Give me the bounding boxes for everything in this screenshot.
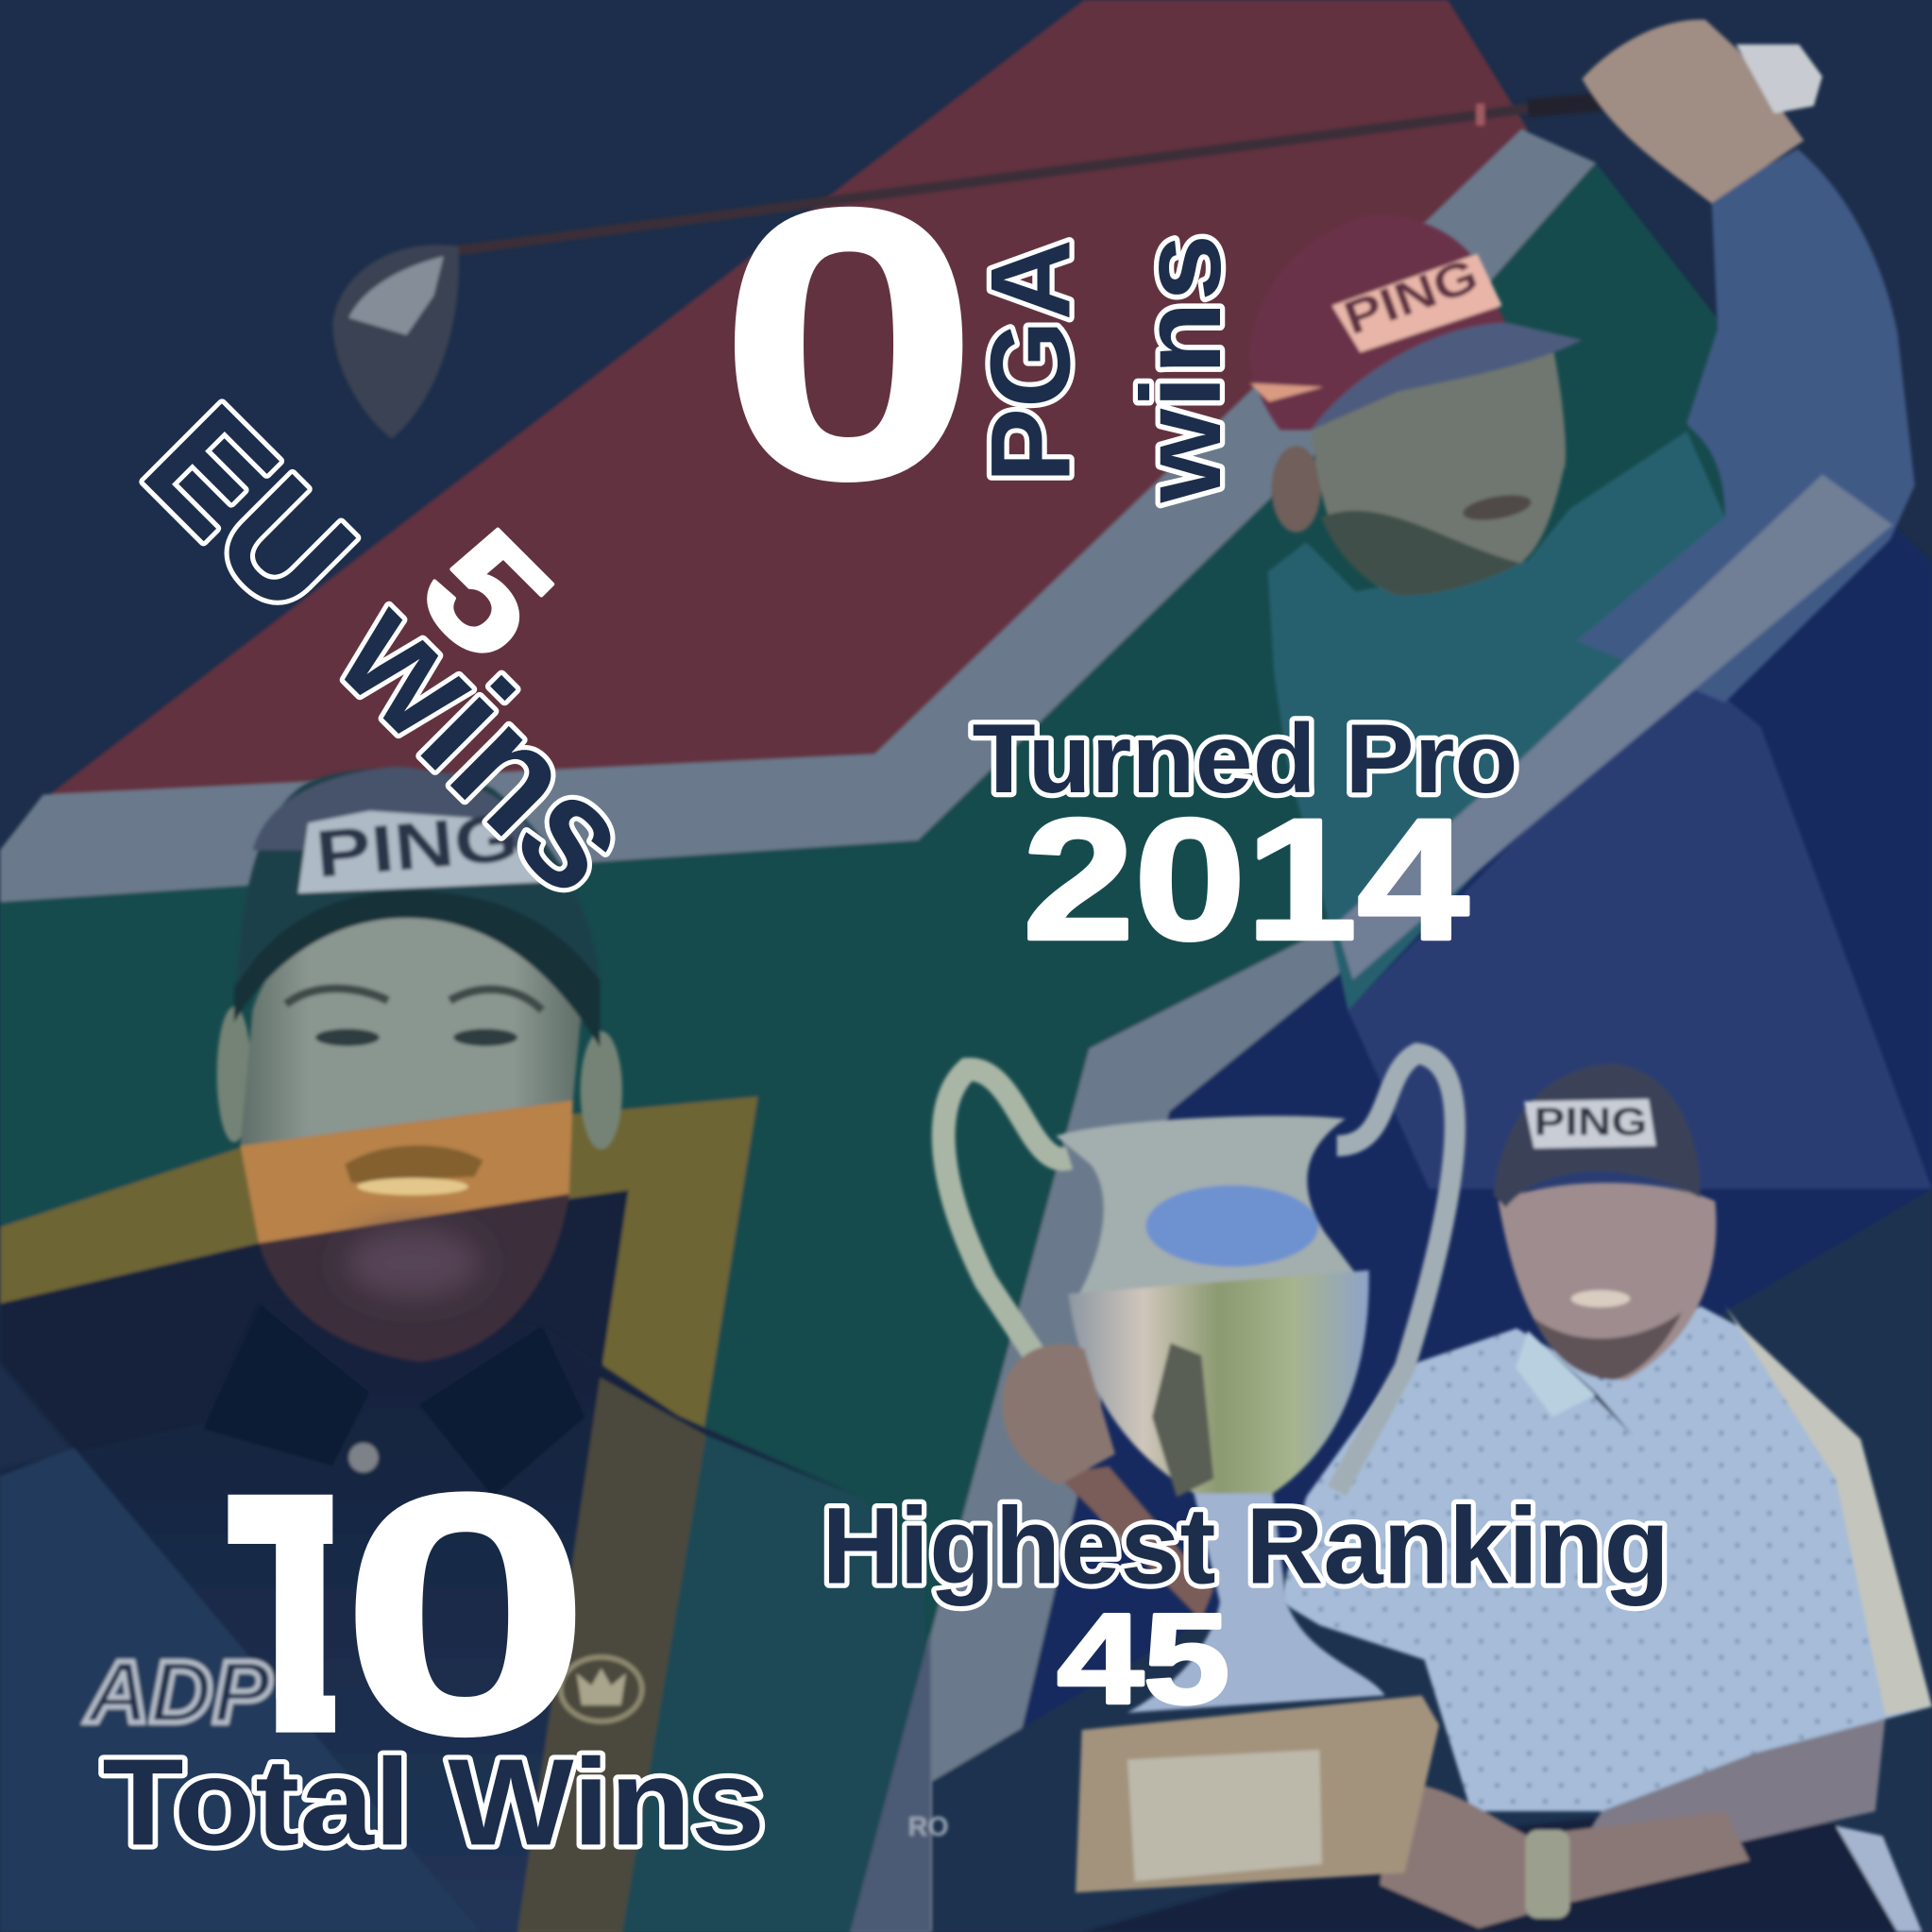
right ear [581,1031,622,1149]
collar opening [1534,1337,1633,1435]
number 10: digit one: 1 [195,1423,385,1805]
beard [259,1194,569,1362]
trophy [943,1054,1455,1892]
shirt [0,1304,930,1932]
hand [1582,20,1804,203]
patch [1524,1099,1656,1148]
club band [1476,104,1484,126]
number 0: 0 [719,129,979,559]
teeth [357,1178,468,1195]
white shorts [1836,1826,1923,1932]
hand and forearm [1380,1785,1750,1928]
flag: red band [49,0,1528,795]
hand on trophy [1002,1344,1115,1484]
club shaft [449,109,1528,251]
cup lower [1068,1270,1369,1493]
flag: dark triangle [0,1190,628,1932]
photo: golfer swinging [1249,20,1932,1189]
patch text: PING [1337,248,1485,345]
right eye [453,1029,517,1046]
cap brim [234,890,600,1047]
flag: upper pale band [0,129,1596,902]
beard [1321,511,1520,596]
flag: gold band [0,1096,757,1932]
patch [298,811,542,893]
patch text: PING [1534,1099,1648,1144]
photo: golfer with trophy [1084,1063,1932,1932]
shirt pale band [850,1633,930,1932]
left collar [203,1304,369,1466]
face upper [240,913,582,1146]
crown ring [561,1657,642,1721]
right handle [1337,1054,1455,1491]
label turned pro: Turned Pro [973,704,1518,814]
label highest ranking: Highest Ranking [822,1486,1669,1607]
flag: blue field [931,525,1932,1932]
right collar [419,1326,585,1497]
cap brim [1311,323,1582,430]
cap [237,769,600,986]
stat: EU wins [112,371,668,926]
cap patch [298,800,542,893]
cap [1493,1063,1701,1208]
right brow [449,990,542,1010]
stat: turned pro [973,704,1518,975]
face middle [240,1100,573,1244]
navy lower-right panel [931,1189,1932,1932]
navy lower-left panel [0,1448,481,1932]
dark trousers [1084,1818,1910,1932]
label wins: wins [1118,234,1245,503]
crown logo [561,1657,642,1721]
swoosh [1249,383,1323,401]
polo dots [1280,1306,1932,1811]
stat: total wins [98,1491,765,1851]
club grip [1528,101,1608,109]
rank 45: 45 [1058,1586,1229,1730]
label total wins: Total Wins [102,1733,765,1871]
ADP logo: ADP [84,1642,271,1741]
left handle [943,1070,1146,1552]
flag: lower pale band [850,453,1892,1932]
cap logo patch [1332,248,1502,352]
shirt green right [622,1435,930,1932]
upper arm [1565,1719,1885,1873]
shirt small text: RO [908,1812,949,1842]
hoodie and upper arm [1268,432,1725,1010]
forearm pale section [1335,474,1892,979]
shirt gold strip [517,1378,706,1932]
stat: PGA wins [719,129,1245,559]
cup blue reflection [1146,1185,1318,1266]
ear [1272,446,1321,533]
moustache [345,1145,483,1183]
face [1499,1183,1716,1380]
left brow [286,989,388,1004]
polo shirt [1280,1306,1932,1811]
cup upper [1056,1116,1362,1306]
label EU: EU [112,371,388,647]
beard shade [1534,1313,1682,1380]
teeth [1571,1290,1630,1307]
number 10 top bar of the one [228,1495,332,1544]
plaque [1127,1750,1322,1882]
number 10: digit zero: 0 [340,1423,591,1805]
cap upper [252,767,542,850]
wooden base [1076,1695,1439,1892]
lower torso [1348,678,1932,1189]
club grip end [1737,44,1822,113]
mouth shadow [1461,491,1533,525]
label PGA: PGA [968,239,1094,483]
dark reflection [1152,1343,1213,1497]
raised arm sleeve [1577,149,1915,703]
face [1311,345,1566,596]
crown [577,1669,626,1705]
sleeve pale stripe [1725,1306,1932,1715]
collar pale [1516,1330,1596,1417]
year 2014: 2014 [1023,783,1468,975]
number 5: 5 [387,496,585,694]
patch text: PING [313,800,521,891]
left eye [315,1029,380,1046]
label wins: wins [306,565,668,926]
patch [1332,254,1502,352]
chin [345,1229,481,1297]
forearm behind trophy [1056,1466,1213,1620]
watch [1525,1830,1569,1919]
cap crown [1249,215,1508,430]
club head [332,245,459,439]
cap patch [1524,1099,1656,1148]
photo: smiling golfer portrait [0,767,949,1932]
golf club [332,101,1608,439]
stat: highest ranking [822,1486,1669,1730]
collar button [348,1443,379,1472]
left ear [217,1007,251,1143]
stem [1127,1493,1385,1713]
club head highlight [348,256,444,335]
